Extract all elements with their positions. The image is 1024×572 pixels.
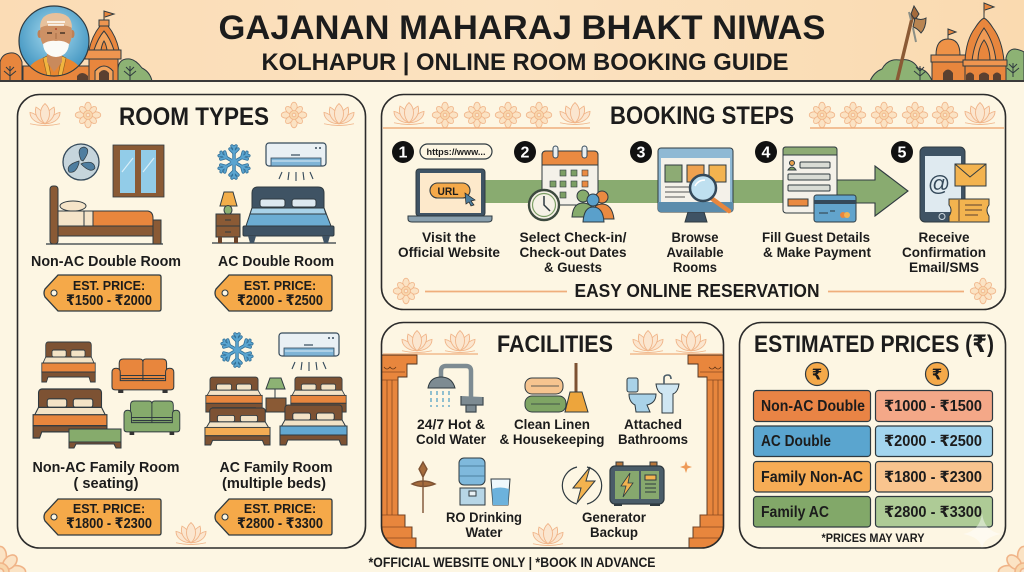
pillars <box>381 355 724 548</box>
heading: booking steps: BOOKING STEPS <box>610 102 794 130</box>
label: linen and housekeeping <box>500 417 604 447</box>
price tag: non-AC family room: EST. PRICE: <box>73 502 145 516</box>
icons: rupee coins: ₹ <box>932 366 942 384</box>
price tag: non-AC family room <box>44 499 161 535</box>
step 4: guest details and payment <box>755 141 856 222</box>
icon: RO drinking water <box>459 458 510 505</box>
step 2 label: & Guests <box>544 260 602 275</box>
right illustration: axe standard, temples, bushes <box>870 3 1024 81</box>
price row: non-AC double: ₹1000 - ₹1500 <box>884 398 982 415</box>
corner ornament: bottom right <box>998 546 1024 572</box>
label: generator backup: Backup <box>590 525 638 540</box>
label: non-AC double room: Non-AC Double Room <box>31 253 181 270</box>
price row: AC double: AC Double <box>761 433 831 450</box>
step 4 label: Fill Guest Details <box>762 230 870 245</box>
price tag: non-AC double room <box>44 275 161 311</box>
icon: linen and housekeeping <box>525 363 588 412</box>
note: prices may vary: *PRICES MAY VARY <box>822 533 925 545</box>
price tag: AC double room: EST. PRICE: <box>244 279 316 293</box>
step 3 label: Available <box>666 245 724 260</box>
step 2: select dates: 2 <box>521 144 530 162</box>
step 1 label: Official Website <box>398 245 500 260</box>
label: linen and housekeeping: Clean Linen <box>514 417 590 432</box>
price row: family non-AC <box>754 462 992 492</box>
label: hot and cold water <box>416 417 487 447</box>
ornament: sparkle <box>680 461 692 473</box>
price row: non-AC double: Non-AC Double <box>761 398 865 415</box>
price tag: AC double room <box>215 275 332 311</box>
price tag: AC family room: EST. PRICE: <box>244 502 316 516</box>
icon: AC double room <box>212 143 336 243</box>
step 1 label: Visit the <box>422 230 476 245</box>
tagline ornaments <box>393 278 996 304</box>
tagline: easy online reservation: EASY ONLINE RESERVATION <box>574 281 820 301</box>
label: hot and cold water: Cold Water <box>416 432 487 447</box>
label: non-AC family room <box>32 459 180 492</box>
panel: facilities <box>381 322 724 548</box>
price row: family AC <box>754 496 992 527</box>
ornament: lotus at panel base <box>533 524 563 546</box>
icon: staff ornament <box>412 462 435 513</box>
step 5 label: Confirmation <box>902 245 986 260</box>
price row: family non-AC: ₹1800 - ₹2300 <box>884 469 982 486</box>
heading: facilities: FACILITIES <box>497 331 613 358</box>
step 2: select dates <box>514 141 614 222</box>
icon: AC family room <box>205 333 347 445</box>
step 5 label: Receive <box>918 230 970 245</box>
panel: estimated prices <box>740 322 1006 548</box>
ornament: lotus at panel base <box>176 523 206 545</box>
icons: rupee coins <box>806 362 948 386</box>
step 3 label: Rooms <box>673 260 717 275</box>
price row: family AC: ₹2800 - ₹3300 <box>884 504 982 521</box>
label: RO drinking water <box>446 510 522 540</box>
price tag: AC family room <box>215 499 332 535</box>
title: GAJANAN MAHARAJ BHAKT NIWAS <box>218 9 826 47</box>
heading ornaments <box>383 331 722 354</box>
step 2 label <box>520 230 627 275</box>
price row: AC double <box>754 426 992 456</box>
label: non-AC family room: ( seating) <box>74 475 138 492</box>
panel: room types <box>18 94 366 548</box>
corner ornament: bottom left <box>0 546 26 572</box>
step 1: visit website: https://www... <box>426 147 486 158</box>
label: RO drinking water: Water <box>466 525 503 540</box>
label: generator backup <box>582 510 647 540</box>
step 5 label <box>902 230 986 275</box>
label: AC double room: AC Double Room <box>218 253 334 270</box>
step 1: visit website: URL <box>438 186 459 198</box>
step 3: browse rooms: 3 <box>637 144 646 162</box>
ornaments beside heading <box>30 102 354 128</box>
step 5: confirmation: @ <box>928 171 950 196</box>
price tag: non-AC double room: EST. PRICE: <box>73 279 145 293</box>
price tag: AC family room: ₹2800 - ₹3300 <box>237 516 323 532</box>
label: hot and cold water: 24/7 Hot & <box>417 417 485 432</box>
ornament row left <box>383 102 590 128</box>
panel: booking steps <box>382 94 1006 310</box>
label: generator backup: Generator <box>582 510 647 525</box>
left illustration: temple and trees <box>0 11 152 81</box>
step 4: guest details and payment: 4 <box>762 144 771 162</box>
label: RO drinking water: RO Drinking <box>446 510 522 525</box>
price row: non-AC double <box>754 390 992 422</box>
label: attached bathrooms: Attached <box>624 417 682 432</box>
label: AC family room: AC Family Room <box>220 459 332 476</box>
subtitle: KOLHAPUR | ONLINE ROOM BOOKING GUIDE <box>262 49 788 76</box>
label: attached bathrooms <box>618 417 688 447</box>
step 1: visit website <box>392 141 492 222</box>
footer note: *OFFICIAL WEBSITE ONLY | *BOOK IN ADVANCE <box>368 554 656 570</box>
price row: AC double: ₹2000 - ₹2500 <box>884 433 982 450</box>
icons: rupee coins: ₹ <box>812 366 822 384</box>
price row: family non-AC: Family Non-AC <box>761 469 863 486</box>
price tag: non-AC family room: ₹1800 - ₹2300 <box>66 516 152 532</box>
step 2 label: Check-out Dates <box>520 245 626 260</box>
icon: non-AC double room <box>46 144 164 244</box>
ornament row right <box>809 102 1004 128</box>
portrait medallion <box>19 6 89 78</box>
label: AC family room <box>220 459 332 492</box>
price tag: non-AC double room: ₹1500 - ₹2000 <box>66 293 152 309</box>
step 1 label <box>398 230 500 260</box>
icon: attached bathrooms <box>627 375 679 413</box>
label: linen and housekeeping: & Housekeeping <box>500 432 604 447</box>
heading: estimated prices: ESTIMATED PRICES (₹) <box>754 331 994 358</box>
step 5: confirmation: 5 <box>898 144 907 162</box>
step 1: visit website: 1 <box>399 144 408 162</box>
icon: hot and cold water <box>428 366 483 412</box>
price tag: AC double room: ₹2000 - ₹2500 <box>237 293 323 309</box>
step 3: browse rooms <box>630 141 733 222</box>
step 3 label: Browse <box>672 230 719 245</box>
step 2 label: Select Check-in/ <box>520 230 627 245</box>
heading: room types: ROOM TYPES <box>119 103 269 131</box>
arrow: progress arrow through steps <box>480 166 908 216</box>
step 5: confirmation <box>891 141 989 222</box>
label: attached bathrooms: Bathrooms <box>618 432 688 447</box>
step 5 label: Email/SMS <box>909 260 979 275</box>
icon: non-AC family room <box>33 342 180 448</box>
label: non-AC family room: Non-AC Family Room <box>32 459 180 476</box>
step 4 label: & Make Payment <box>763 245 872 260</box>
price row: family AC: Family AC <box>761 504 829 521</box>
watermark sparkle <box>963 513 1001 548</box>
step 4 label <box>762 230 872 260</box>
label: AC family room: (multiple beds) <box>222 475 326 492</box>
header banner <box>0 0 1024 82</box>
step 3 label <box>666 230 724 275</box>
icon: generator backup <box>562 462 664 506</box>
